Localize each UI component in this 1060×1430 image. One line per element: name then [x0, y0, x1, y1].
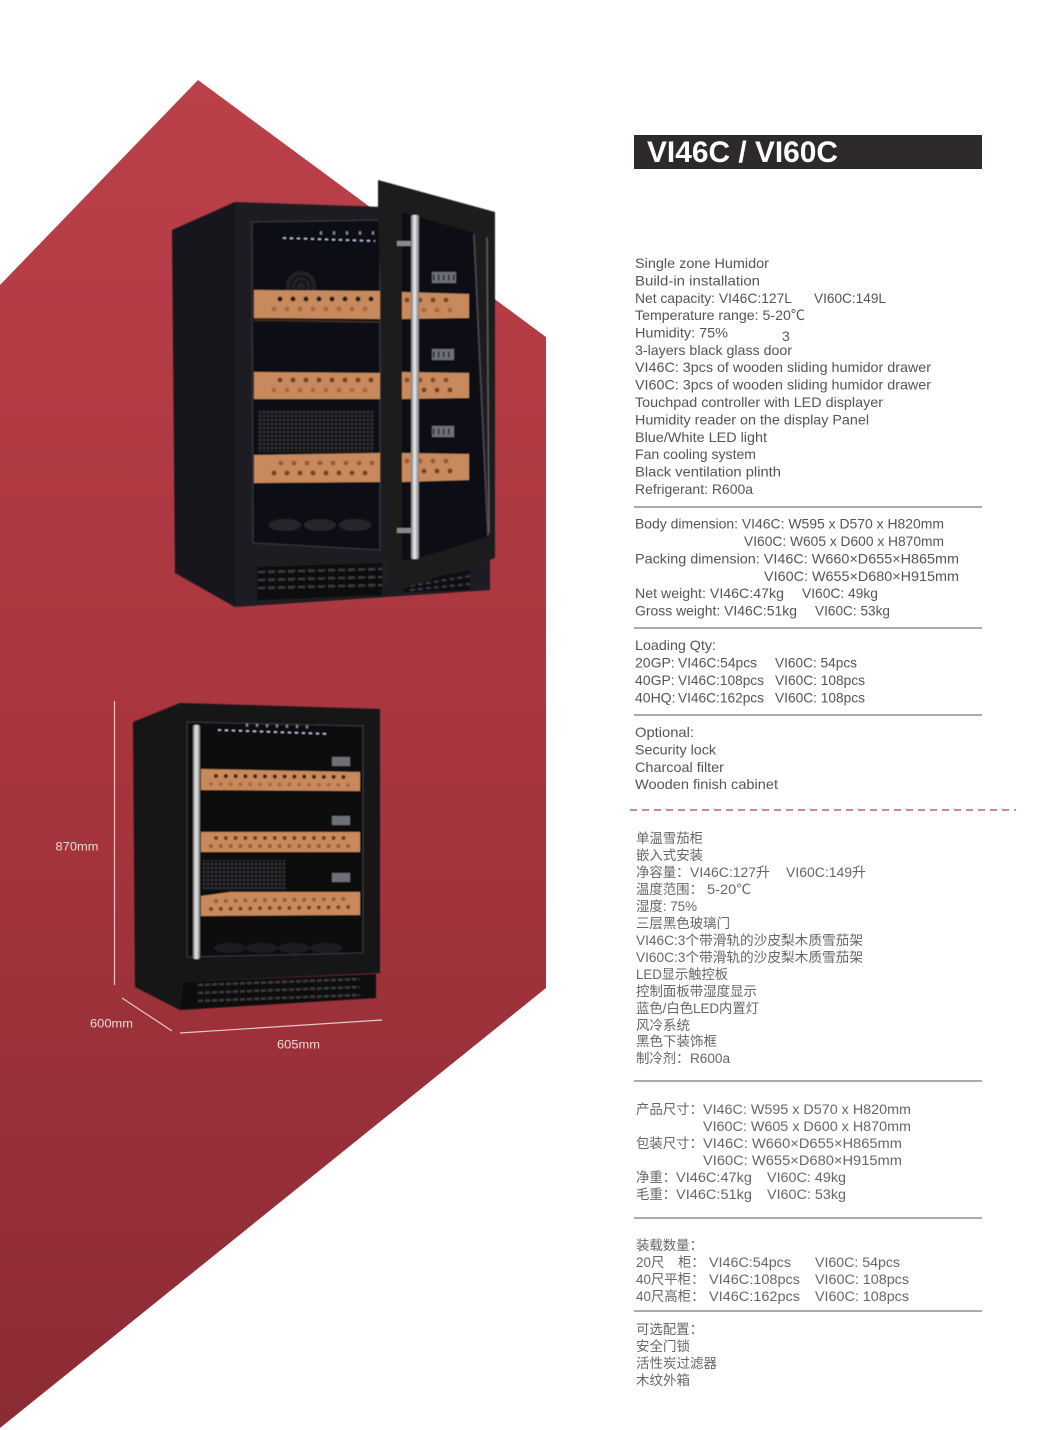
LED strip: [283, 238, 375, 241]
cabinet side: [172, 202, 235, 607]
English feature list: Single zone Humidor: [635, 255, 769, 271]
Chinese loading quantity: VI60C: 108pcs: [815, 1272, 909, 1287]
English optional accessories: Security lock: [635, 742, 717, 758]
wooden drawer 3: [254, 453, 380, 483]
English feature list: Fan cooling system: [635, 446, 756, 462]
English feature list: Touchpad controller with LED displayer: [635, 394, 883, 410]
Chinese dimensions and weights: VI60C: W605 x D600 x H870mm: [703, 1119, 911, 1134]
Chinese feature list: 蓝色/白色LED内置灯: [636, 1000, 759, 1016]
English loading quantity: VI60C: 54pcs: [775, 654, 857, 670]
Chinese loading quantity: 40尺高柜：: [636, 1285, 704, 1305]
Chinese loading quantity: [636, 1234, 909, 1305]
English feature list: 3-layers black glass door: [635, 342, 792, 358]
cabinet side: [133, 703, 180, 1010]
control icons: [320, 232, 375, 234]
Chinese dimensions and weights: VI60C: 53kg: [767, 1187, 846, 1202]
Chinese dimensions and weights: 净重：: [636, 1166, 676, 1186]
Chinese loading quantity: VI60C: 108pcs: [815, 1289, 909, 1304]
Chinese feature list: 5-20℃: [707, 882, 751, 897]
English loading quantity: 40GP:: [635, 672, 675, 688]
English loading quantity: VI60C: 108pcs: [775, 690, 865, 706]
product photo: closed-door humidor: [133, 703, 380, 1010]
open door frame: [378, 180, 495, 592]
English feature list: Black ventilation plinth: [635, 464, 781, 480]
ventilation grid: [258, 410, 374, 452]
Chinese dimensions and weights: VI60C: 49kg: [767, 1170, 846, 1185]
product photo: open-door humidor: [172, 180, 495, 607]
Chinese loading quantity: VI46C:162pcs: [709, 1289, 800, 1304]
Chinese feature list: VI46C:127升: [690, 865, 770, 880]
English dimensions and weights: VI60C: 53kg: [815, 602, 890, 618]
English dimensions and weights: VI60C: W605 x D600 x H870mm: [744, 533, 944, 549]
Chinese feature list: 风冷系统: [636, 1018, 690, 1033]
English feature list: Build-in installation: [635, 272, 760, 288]
Chinese optional accessories: 安全门锁: [636, 1338, 690, 1354]
English feature list: Refrigerant: R600a: [635, 481, 753, 497]
English loading quantity: 20GP:: [635, 654, 675, 670]
door front: [180, 703, 380, 1010]
bottom plinth grille: [257, 563, 470, 600]
Chinese feature list: VI60C:3个带滑轨的沙皮梨木质雪茄架: [636, 949, 863, 965]
Chinese loading quantity: 柜：: [678, 1251, 705, 1271]
English feature list: 3: [782, 328, 790, 344]
English loading quantity: VI46C:54pcs: [678, 654, 757, 670]
Chinese feature list: 黑色下装饰框: [636, 1033, 717, 1049]
depth dimension: [90, 998, 172, 1031]
Chinese dimensions and weights: 包装尺寸：: [636, 1132, 703, 1152]
Chinese feature list: VI60C:149升: [786, 865, 866, 880]
English feature list: VI46C: 3pcs of wooden sliding humidor drawer: [635, 359, 931, 375]
floor rack: [214, 943, 342, 953]
Chinese feature list: 温度范围：: [636, 878, 703, 898]
control icons: [246, 725, 316, 727]
Chinese feature list: VI46C:3个带滑轨的沙皮梨木质雪茄架: [636, 932, 863, 948]
Chinese loading quantity: 40尺平柜：: [636, 1268, 704, 1288]
English dimensions and weights: Packing dimension: VI46C: W660×D655×H865mm: [635, 550, 959, 566]
English feature list: Blue/White LED light: [635, 429, 767, 445]
English dimensions and weights: Body dimension: VI46C: W595 x D570 x H820mm: [635, 516, 944, 532]
Chinese loading quantity: VI60C: 54pcs: [815, 1255, 900, 1270]
steel door handle: [397, 215, 419, 559]
depth dimension: 600mm: [90, 1016, 133, 1030]
Chinese dimensions and weights: 毛重：: [636, 1183, 676, 1203]
Chinese dimensions and weights: 产品尺寸：: [636, 1098, 703, 1118]
English optional accessories: Charcoal filter: [635, 759, 724, 775]
interior window: [252, 220, 380, 550]
glass window: [187, 722, 363, 957]
Chinese feature list: 单温雪茄柜: [636, 830, 703, 846]
English optional accessories: Wooden finish cabinet: [635, 776, 778, 792]
English feature list: Temperature range: 5-20℃: [635, 307, 805, 323]
English feature list: Humidity: 75%: [635, 324, 728, 340]
English feature list: VI60C:149L: [814, 290, 886, 306]
English feature list: Humidity reader on the display Panel: [635, 412, 869, 428]
English optional accessories: [635, 724, 778, 792]
width dimension: 605mm: [277, 1038, 320, 1052]
Chinese optional accessories: [636, 1318, 718, 1388]
English dimensions and weights: [635, 516, 959, 618]
width dimension: [180, 1020, 382, 1052]
Chinese loading quantity: VI46C:54pcs: [709, 1255, 791, 1270]
English dimensions and weights: VI60C: W655×D680×H915mm: [764, 568, 959, 584]
Chinese dimensions and weights: VI46C:51kg: [676, 1187, 752, 1202]
height dimension: 870mm: [56, 840, 99, 854]
English loading quantity: VI46C:162pcs: [678, 690, 764, 706]
Chinese feature list: 控制面板带湿度显示: [636, 984, 757, 999]
Chinese dimensions and weights: [636, 1098, 911, 1203]
English feature list: Net capacity: VI46C:127L: [635, 290, 792, 306]
Chinese feature list: [636, 830, 866, 1067]
wooden drawer 1: [201, 769, 360, 791]
English loading quantity: Loading Qty:: [635, 637, 716, 653]
cabinet front: [235, 202, 490, 607]
red hexagon background: [0, 80, 546, 1428]
drawer labels: [332, 757, 350, 882]
English loading quantity: VI46C:108pcs: [678, 672, 764, 688]
Chinese feature list: 净容量：: [636, 861, 690, 881]
English feature list: [635, 255, 931, 497]
Chinese loading quantity: 装载数量：: [636, 1234, 703, 1254]
Chinese dimensions and weights: VI46C:47kg: [676, 1170, 752, 1185]
Chinese dimensions and weights: VI46C: W660×D655×H865mm: [703, 1136, 902, 1151]
wooden drawer 3: [201, 892, 360, 916]
Chinese optional accessories: 可选配置：: [636, 1318, 703, 1338]
English dimensions and weights: VI60C: 49kg: [802, 585, 878, 601]
Chinese dimensions and weights: VI60C: W655×D680×H915mm: [703, 1153, 902, 1168]
Chinese feature list: 嵌入式安装: [636, 848, 703, 863]
Chinese loading quantity: VI46C:108pcs: [709, 1272, 800, 1287]
steel door handle: [193, 725, 200, 959]
Chinese optional accessories: 木纹外箱: [636, 1373, 690, 1388]
title bar: VI46C / VI60C: [647, 136, 838, 169]
fan: [286, 271, 316, 301]
Chinese feature list: 制冷剂：: [636, 1047, 690, 1067]
English loading quantity: [635, 637, 865, 706]
English dimensions and weights: Net weight: VI46C:47kg: [635, 585, 784, 601]
title bar: [634, 135, 982, 169]
wooden drawer 2: [254, 372, 380, 399]
LED strip: [218, 730, 330, 734]
Chinese feature list: 湿度: 75%: [636, 899, 697, 914]
floor rack: [269, 519, 371, 531]
Chinese optional accessories: 活性炭过滤器: [636, 1356, 718, 1371]
English dimensions and weights: Gross weight: VI46C:51kg: [635, 602, 797, 618]
English optional accessories: Optional:: [635, 724, 694, 740]
Chinese loading quantity: 20尺: [636, 1255, 664, 1270]
plinth grille: [180, 974, 376, 1010]
Chinese dimensions and weights: VI46C: W595 x D570 x H820mm: [703, 1102, 911, 1117]
dimension annotations: [56, 701, 382, 1052]
Chinese feature list: R600a: [690, 1051, 731, 1066]
wooden drawer 2: [201, 832, 360, 852]
Chinese feature list: 三层黑色玻璃门: [636, 915, 730, 931]
English loading quantity: VI60C: 108pcs: [775, 672, 865, 688]
wooden drawer 1: [254, 290, 380, 322]
ventilation grid: [202, 860, 286, 890]
English feature list: VI60C: 3pcs of wooden sliding humidor drawer: [635, 376, 931, 392]
English loading quantity: 40HQ:: [635, 690, 675, 706]
Chinese feature list: LED显示触控板: [636, 967, 728, 982]
